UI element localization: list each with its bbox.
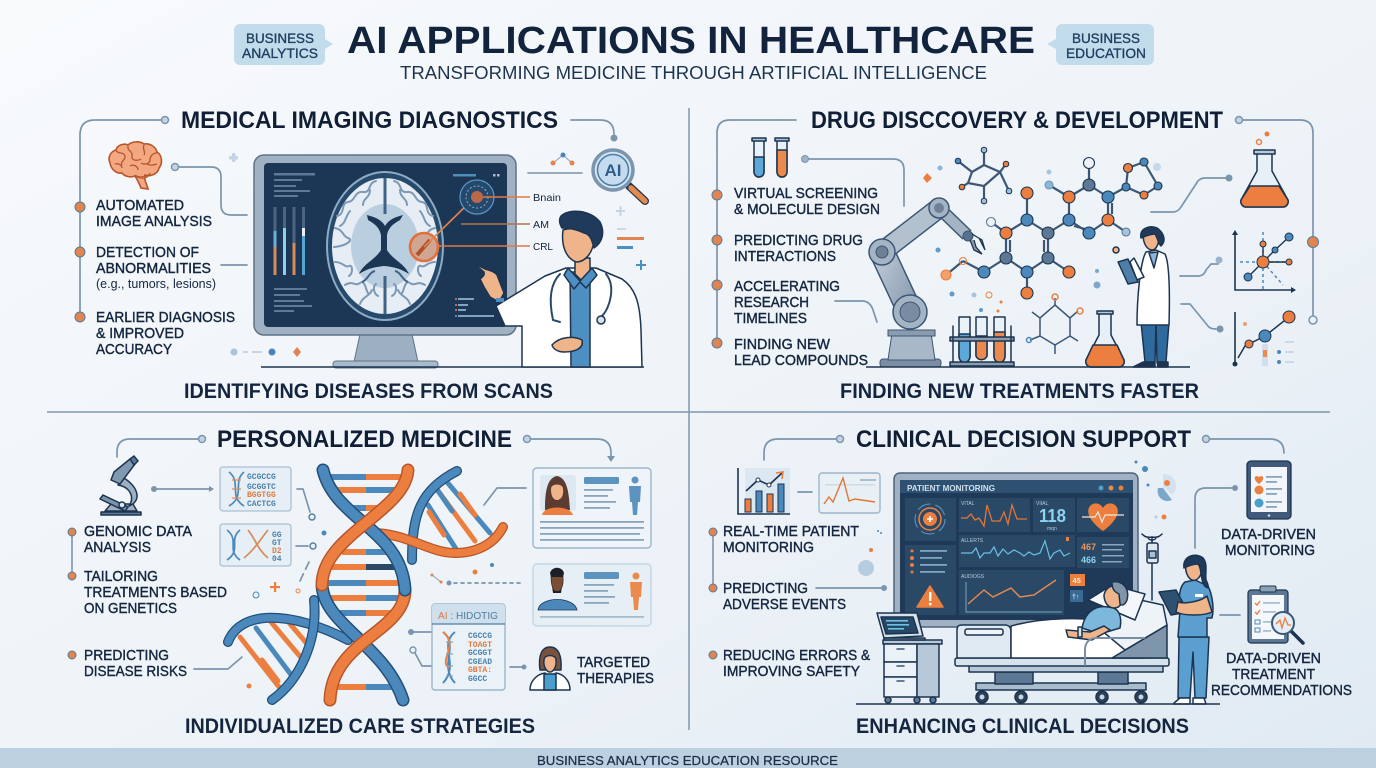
badge: business education: BUSINESS	[1072, 30, 1140, 46]
small plus decorations	[229, 153, 646, 270]
side helix lower left	[228, 600, 348, 700]
bullet: accelerating research: RESEARCH	[734, 295, 809, 311]
bullet: virtual screening: VIRTUAL SCREENING	[734, 186, 878, 202]
screen: alerts waveform: ALLERTS	[961, 538, 984, 544]
DNA card 2: GG	[272, 531, 282, 540]
header	[234, 20, 1154, 83]
screen: numeric tile: 467	[1081, 542, 1096, 552]
label: data-driven treatment recommendations: RECOMMENDATIONS	[1211, 683, 1352, 699]
molecule: top left ring	[955, 147, 1012, 204]
bullet: finding new leads: FINDING NEW	[734, 337, 830, 353]
nurse	[1159, 555, 1213, 704]
bullet: tailoring treatments	[84, 569, 227, 617]
badge: business education: EDUCATION	[1066, 45, 1146, 61]
icon: bar and line chart	[738, 468, 790, 514]
bullet: tailoring treatments: ON GENETICS	[84, 601, 177, 617]
AI genome card: TOAGT	[468, 641, 492, 650]
screen: readout 118: 118	[1039, 506, 1066, 526]
bullet: reducing errors: IMPROVING SAFETY	[723, 664, 860, 680]
ground line	[866, 366, 1190, 368]
callouts and labels: Bnain	[533, 192, 561, 204]
DNA card 2	[220, 524, 291, 566]
ground line	[261, 366, 644, 368]
bullet: real-time monitoring: REAL-TIME PATIENT	[723, 524, 859, 540]
bullet: real-time monitoring	[723, 524, 859, 556]
connector trees	[712, 116, 1318, 348]
footer band: BUSINESS ANALYTICS EDUCATION RESOURCE	[537, 753, 838, 768]
bullet: detection of abnormalities: ABNORMALITIES	[96, 261, 211, 277]
DNA card 1: BGGTGG	[247, 491, 276, 500]
DNA card 2: 04	[272, 555, 282, 564]
AI genome card: GBTA:	[468, 666, 492, 675]
badge: business education	[1047, 24, 1154, 65]
bullet: predicting drug interactions	[734, 233, 863, 265]
label: data-driven monitoring: DATA-DRIVEN	[1221, 527, 1316, 543]
large patient monitor: PATIENT MONITORING	[907, 483, 995, 493]
badge: business analytics: ANALYTICS	[242, 45, 318, 61]
label: data-driven monitoring: MONITORING	[1225, 543, 1315, 559]
connector tree with orange bullets	[75, 116, 618, 322]
robot arm	[869, 198, 985, 367]
connectors from heading	[764, 436, 1284, 460]
icon: test tubes	[752, 138, 789, 177]
screen: trend chart: AUDIOGS	[961, 574, 985, 580]
label: data-driven treatment recommendations: DATA-DRIVEN	[1226, 651, 1321, 667]
callouts and labels: CRL	[533, 241, 553, 253]
icon: tablet	[1247, 461, 1291, 519]
icon: flask top right	[1241, 132, 1288, 207]
bullet: predicting adverse events: ADVERSE EVENTS	[723, 597, 846, 613]
patient card 2	[533, 564, 651, 626]
molecule decorations	[923, 166, 1100, 312]
connector: microscope to card	[151, 486, 214, 492]
monitor	[254, 155, 561, 368]
bullet: detection of abnormalities: (e.g., tumors, lesions)	[96, 277, 216, 291]
bullet: predicting adverse events: PREDICTING	[723, 581, 808, 597]
label: targeted therapies	[577, 655, 654, 687]
DNA card 1: GCGGTC	[247, 483, 276, 492]
DNA card 2: GT	[272, 539, 282, 548]
brain scan	[327, 172, 443, 320]
bullet: virtual screening: & MOLECULE DESIGN	[734, 202, 880, 218]
DNA card 1: GCGCCG	[247, 473, 276, 482]
screen: alerts waveform	[959, 535, 1075, 567]
bullet: predicting disease risks: DISEASE RISKS	[84, 664, 187, 680]
screen: small indicators: 45	[1072, 576, 1081, 585]
bullet: real-time monitoring: MONITORING	[723, 540, 814, 556]
screen: numeric tile	[1077, 537, 1129, 568]
small decorations	[246, 530, 494, 688]
caption: ENHANCING CLINICAL DECISIONS	[856, 715, 1189, 738]
chart: network graph	[1232, 230, 1296, 293]
icon: brain	[109, 142, 161, 189]
subtitle: TRANSFORMING MEDICINE THROUGH ARTIFICIAL INTELLIGENCE	[400, 63, 987, 83]
bullet: accelerating research: ACCELERATING	[734, 279, 840, 295]
icon: clipboard with magnifier	[1248, 586, 1303, 643]
bullet: predicting drug interactions: INTERACTIONS	[734, 249, 836, 265]
screen: vital waveform	[959, 498, 1030, 532]
callouts and labels: AM	[533, 219, 549, 231]
bullet: genomic data: GENOMIC DATA	[84, 524, 192, 540]
screen: readout 118: VIIAL	[1036, 501, 1048, 507]
screen: heart tile	[1077, 498, 1129, 532]
bullet: finding new leads	[734, 337, 868, 369]
main strands	[322, 470, 408, 700]
bullet: earlier diagnosis	[96, 310, 235, 358]
large patient monitor	[894, 473, 1138, 627]
bullet: earlier diagnosis: & IMPROVED	[96, 326, 184, 342]
bullet: predicting adverse events	[723, 581, 846, 613]
bullet line and dots	[709, 528, 717, 659]
screen: status tile	[905, 498, 956, 541]
heading: CLINICAL DECISION SUPPORT	[856, 426, 1191, 453]
heading: PERSONALIZED MEDICINE	[217, 426, 512, 453]
panel: drug discovery and development	[712, 107, 1318, 403]
DNA card 1	[220, 467, 291, 511]
side helix upper right	[376, 471, 503, 560]
bullet: predicting drug interactions: PREDICTING DRUG	[734, 233, 863, 249]
test tube rack	[950, 317, 1014, 366]
panel: medical imaging diagnostics	[75, 107, 646, 403]
bullet: reducing errors: REDUCING ERRORS &	[723, 648, 870, 664]
hospital bed and patient	[955, 582, 1169, 703]
bullet: detection of abnormalities: DETECTION OF	[96, 245, 199, 261]
ground line	[856, 703, 1220, 705]
bullet: predicting disease risks	[84, 648, 187, 680]
AI genome card: AI : HIDOTIG	[438, 611, 498, 622]
icon: AI magnifier	[593, 150, 645, 201]
connectors to patient cards	[446, 488, 526, 586]
connector: nurse to tablet	[1195, 485, 1238, 548]
AI genome card: GCGGT	[468, 649, 492, 658]
AI genome card: CGCCG	[468, 632, 492, 641]
connectors: cards to helix	[296, 489, 316, 583]
AI genome card: CGEAD	[468, 658, 492, 667]
DNA card 1: CACTCG	[247, 500, 276, 509]
panel: clinical decision support	[709, 426, 1352, 738]
connector and decoration	[816, 530, 887, 591]
title: AI APPLICATIONS IN HEALTHCARE	[347, 20, 1035, 62]
badge: business analytics	[234, 24, 333, 65]
scientist	[1113, 227, 1169, 367]
bullet: virtual screening	[734, 186, 880, 218]
AI genome card	[408, 604, 505, 690]
screen: vital waveform: VITAL	[961, 501, 975, 507]
bullet: automated image analysis: AUTOMATED	[96, 198, 184, 214]
DNA card 2: D2	[272, 547, 282, 556]
label: data-driven treatment recommendations	[1211, 651, 1352, 699]
screen: readout 118	[1033, 498, 1075, 532]
chart: trend nodes	[1232, 311, 1295, 366]
icon: AI magnifier: AI	[604, 161, 622, 180]
small hexagon molecule	[1026, 294, 1083, 354]
patient card 1	[533, 468, 651, 548]
bullet: finding new leads: LEAD COMPOUNDS	[734, 353, 868, 369]
heading: DRUG DISCCOVERY & DEVELOPMENT	[811, 107, 1223, 134]
tiny network decoration	[528, 152, 582, 173]
footer band	[0, 748, 1376, 768]
bullet line and dots	[68, 528, 76, 659]
flask on bench	[1086, 311, 1124, 367]
bullet: accelerating research: TIMELINES	[734, 311, 807, 327]
callouts and labels	[410, 180, 561, 261]
label: targeted therapies: TARGETED	[577, 655, 650, 671]
screen: readout 118: mqn	[1047, 526, 1057, 532]
bullet: reducing errors	[723, 648, 870, 680]
bullet: tailoring treatments: TREATMENTS BASED	[84, 585, 227, 601]
caption: FINDING NEW TREATMENTS FASTER	[840, 380, 1199, 403]
screen: trend chart	[959, 570, 1064, 615]
bullet: genomic data	[84, 524, 192, 556]
small legend dashes	[617, 228, 644, 249]
connector and doctor icon	[510, 647, 570, 690]
label: data-driven treatment recommendations: TREATMENT	[1232, 667, 1315, 683]
connector: brain to monitor	[172, 164, 247, 215]
helix rungs	[325, 477, 405, 687]
dots and pie decoration	[1134, 460, 1176, 520]
bullet: detection of abnormalities	[96, 245, 216, 291]
vital card	[819, 473, 880, 513]
badge: business analytics: BUSINESS	[246, 30, 314, 46]
bullet: automated image analysis	[96, 198, 212, 230]
heading: MEDICAL IMAGING DIAGNOSTICS	[181, 107, 558, 134]
doctor pointing at screen	[473, 211, 642, 367]
AI genome card: GGCC	[468, 675, 487, 684]
label: targeted therapies: THERAPIES	[577, 671, 654, 687]
bullet: earlier diagnosis: ACCURACY	[96, 342, 172, 358]
bedside cart and laptop	[877, 613, 942, 703]
bullet: accelerating research	[734, 279, 840, 327]
connector: tubes to molecule	[802, 156, 904, 322]
bullet: predicting disease risks: PREDICTING	[84, 648, 169, 664]
screen: alert list tile	[905, 545, 956, 615]
molecule: main structure	[941, 158, 1162, 299]
DNA helix	[228, 470, 503, 700]
bullet: earlier diagnosis: EARLIER DIAGNOSIS	[96, 310, 235, 326]
screen sidebars and charts	[274, 173, 500, 317]
connectors to right icons	[1151, 174, 1232, 332]
icon: microscope	[100, 456, 141, 515]
connector: risks to helix	[194, 657, 242, 669]
screen: small indicators: †↑	[1072, 594, 1079, 601]
bullet: automated image analysis: IMAGE ANALYSIS	[96, 214, 212, 230]
panel: personalized medicine	[68, 426, 654, 738]
bullet: tailoring treatments: TAILORING	[84, 569, 158, 585]
screen: small indicators	[1070, 574, 1085, 602]
caption: IDENTIFYING DISEASES FROM SCANS	[184, 380, 553, 403]
label: data-driven monitoring	[1221, 527, 1316, 559]
bullet: genomic data: ANALYSIS	[84, 540, 151, 556]
caption: INDIVIDUALIZED CARE STRATEGIES	[185, 715, 535, 738]
decorative dots	[230, 347, 301, 357]
connectors from heading	[117, 436, 615, 462]
IV stand	[1142, 534, 1162, 600]
screen: numeric tile: 466	[1081, 555, 1096, 565]
